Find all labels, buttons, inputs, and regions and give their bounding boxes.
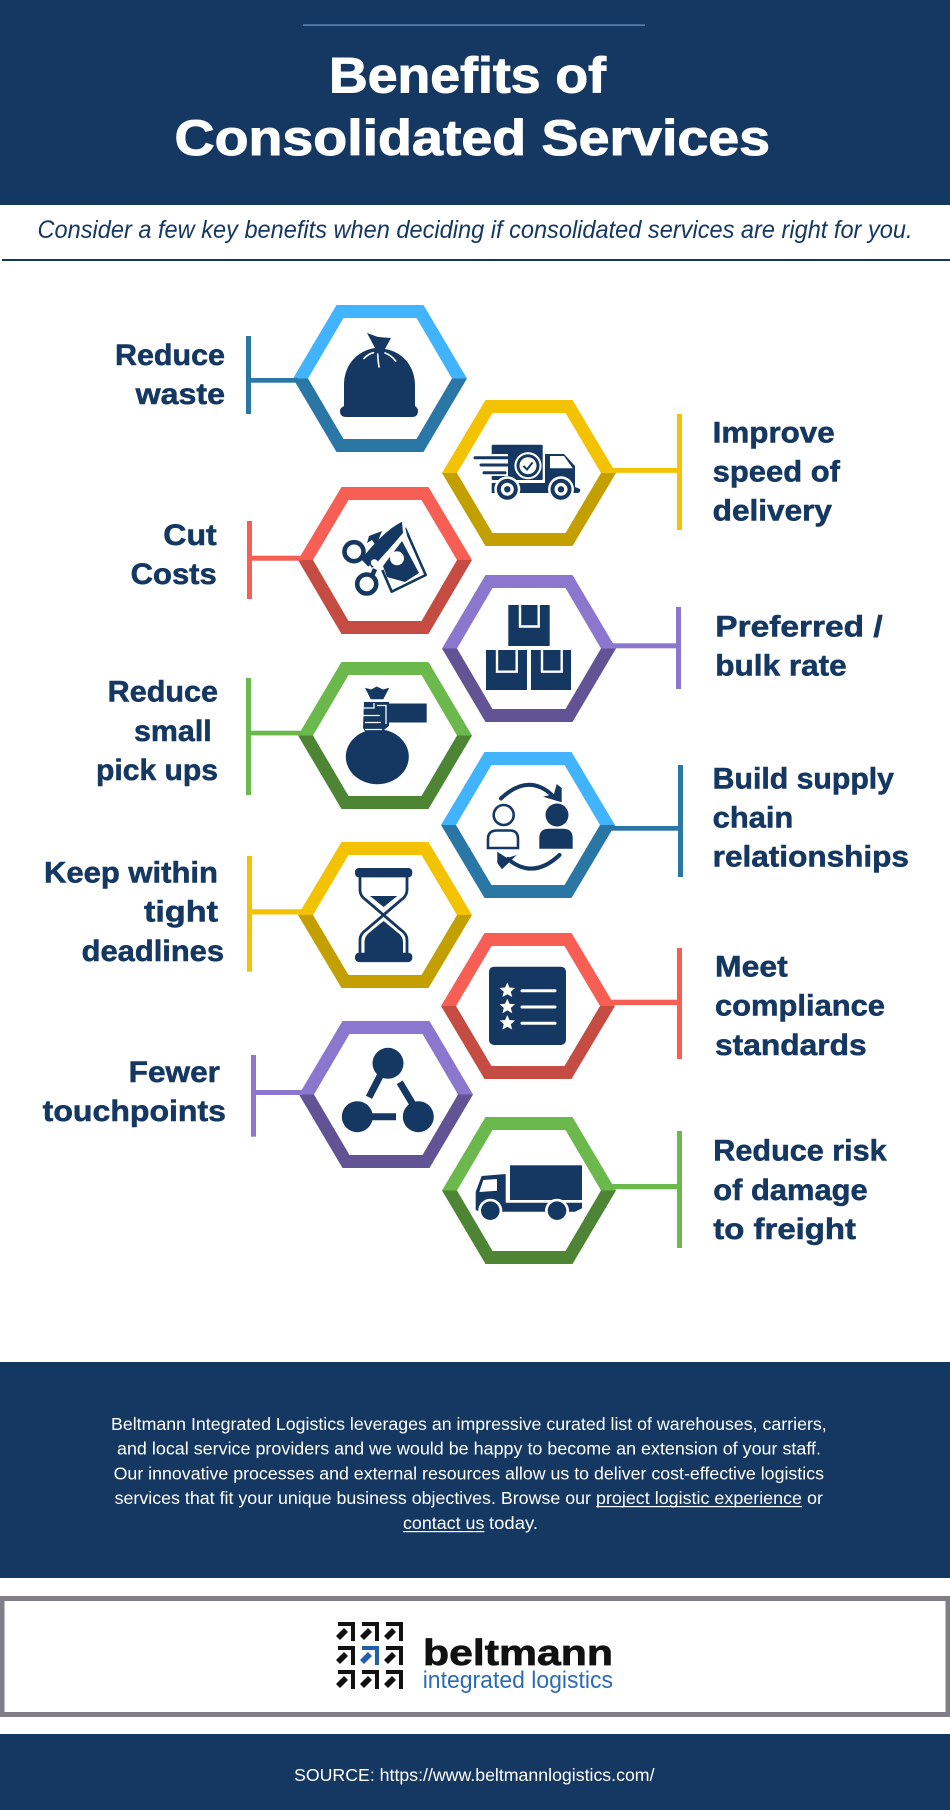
label: meet compliance standards: compliance	[715, 990, 885, 1023]
label: reduce risk of damage to freight: to freight	[713, 1213, 856, 1246]
subtitle: Consider a few key benefits when deciding if consolidated services are right for you.	[38, 216, 912, 244]
icon: hourglass	[355, 868, 412, 962]
icon: hand holding money bag	[346, 686, 427, 784]
label: meet compliance standards	[715, 951, 885, 1062]
label: keep within tight deadlines: deadlines	[82, 935, 224, 968]
label: fewer touchpoints: Fewer	[129, 1056, 221, 1089]
label: reduce risk of damage to freight: Reduce risk	[713, 1135, 887, 1168]
label: keep within tight deadlines	[44, 857, 224, 968]
body text: project logistic experience	[596, 1488, 802, 1508]
hexagon: fewer touchpoints	[299, 1021, 473, 1168]
icon: trash bag	[340, 333, 418, 417]
hexagon: cut costs	[298, 487, 472, 634]
icon: stacked boxes	[486, 605, 571, 690]
label: reduce waste	[115, 339, 225, 411]
label: fewer touchpoints: touchpoints	[43, 1095, 226, 1128]
label: improve speed of delivery: Improve	[713, 417, 835, 450]
label: improve speed of delivery	[713, 417, 840, 528]
logo mark	[336, 1622, 403, 1689]
source bar	[0, 1734, 950, 1810]
body text	[111, 1414, 827, 1533]
body text: today.	[489, 1513, 538, 1533]
label: preferred / bulk rate	[715, 611, 883, 682]
connector: fewer touchpoints	[251, 1055, 303, 1137]
icon: connected nodes	[342, 1048, 434, 1132]
hexagon: improve speed of delivery	[442, 400, 616, 546]
logo wordmark	[423, 1632, 613, 1694]
hexagon: meet compliance standards	[441, 933, 615, 1079]
hexagon: reduce risk of damage	[442, 1117, 616, 1264]
label: reduce small pick ups: small	[134, 715, 212, 748]
label: reduce small pick ups: Reduce	[108, 676, 218, 709]
connector: freight damage	[612, 1131, 682, 1248]
hexagon: build supply chain relationships	[441, 752, 615, 898]
body text: and local service providers and we would be happy to become an extension of your staff.	[117, 1438, 821, 1458]
label: cut costs	[131, 519, 217, 591]
logo wordmark: integrated logistics	[423, 1667, 613, 1694]
label: reduce risk of damage to freight	[713, 1135, 887, 1246]
icon: two people exchange	[488, 784, 573, 869]
hexagon: preferred / bulk rate	[442, 575, 616, 722]
connector: keep within tight deadlines	[247, 856, 302, 972]
connector: reduce small pick ups	[246, 678, 302, 795]
body text: Beltmann Integrated Logistics leverages an impressive curated list of warehouses, carriers,	[111, 1414, 827, 1434]
connector: reduce waste	[246, 336, 297, 414]
connector: improve speed	[612, 414, 682, 530]
label: fewer touchpoints	[43, 1056, 226, 1128]
icon: scissors cutting money	[344, 522, 426, 594]
connector: cut costs	[247, 521, 302, 599]
label: build supply chain relationships: Build supply	[713, 762, 895, 795]
body text: Our innovative processes and external resources allow us to deliver cost-effective logistics	[114, 1464, 824, 1484]
body text: or	[807, 1488, 823, 1508]
source bar: SOURCE: https://www.beltmannlogistics.com/	[294, 1765, 655, 1785]
icon: freight truck	[476, 1165, 582, 1223]
connector: compliance	[611, 948, 682, 1059]
label: preferred / bulk rate: Preferred /	[715, 611, 883, 644]
hexagon: reduce waste	[293, 305, 467, 452]
label: meet compliance standards: standards	[715, 1029, 867, 1062]
header band	[0, 0, 950, 205]
label: improve speed of delivery: delivery	[713, 495, 833, 528]
icon: star checklist	[489, 967, 566, 1045]
label: reduce small pick ups	[96, 676, 218, 787]
connector: preferred / bulk rate	[612, 607, 681, 689]
hexagon: keep within tight deadlines	[298, 842, 472, 988]
hexagon: reduce small pick ups	[298, 662, 472, 809]
title	[174, 47, 770, 166]
logo panel	[2, 1598, 948, 1714]
label: cut costs: Cut	[163, 519, 217, 552]
label: keep within tight deadlines: tight	[144, 896, 218, 929]
label: build supply chain relationships	[713, 762, 909, 874]
body text: contact us	[403, 1513, 485, 1533]
label: preferred / bulk rate: bulk rate	[715, 649, 847, 682]
label: build supply chain relationships: relationships	[713, 841, 909, 874]
footer panel: company description	[0, 1362, 950, 1578]
label: reduce waste: waste	[135, 378, 225, 411]
body text: services that fit your unique business objectives. Browse our	[115, 1488, 591, 1508]
logo wordmark: beltmann	[423, 1632, 613, 1673]
icon: delivery truck	[470, 445, 580, 502]
label: keep within tight deadlines: Keep within	[44, 857, 218, 890]
title: Benefits of	[329, 47, 606, 104]
label: build supply chain relationships: chain	[713, 801, 793, 834]
label: reduce waste: Reduce	[115, 339, 225, 372]
connector: supply chain	[611, 765, 683, 877]
label: cut costs: Costs	[131, 558, 217, 591]
label: meet compliance standards: Meet	[715, 951, 788, 984]
label: improve speed of delivery: speed of	[713, 456, 840, 489]
title: Consolidated Services	[174, 109, 770, 166]
label: reduce small pick ups: pick ups	[96, 754, 218, 787]
label: reduce risk of damage to freight: of damage	[713, 1174, 868, 1207]
